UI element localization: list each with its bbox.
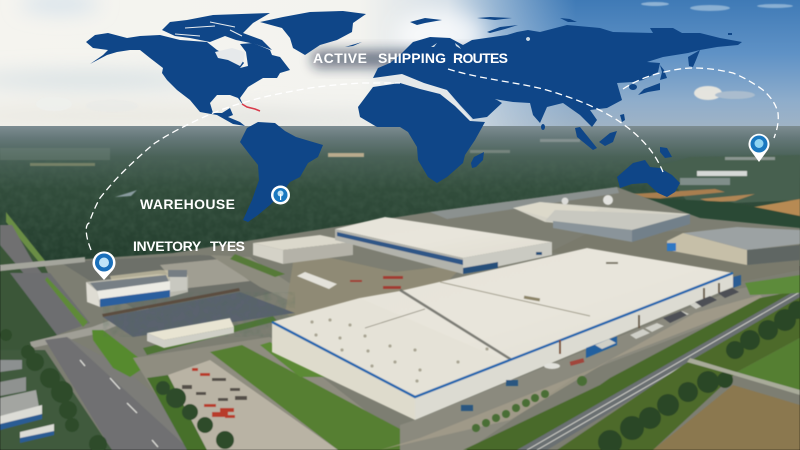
shipping routes dashed lines bbox=[86, 68, 778, 250]
map: Greenland bbox=[260, 11, 366, 55]
map: Eurasia bbox=[373, 25, 742, 127]
map: Canadian Arctic islands bbox=[162, 13, 272, 50]
title: active shipping routes: ROUTES bbox=[453, 50, 508, 66]
warehouse: main large distribution centre bbox=[272, 248, 741, 432]
warehouse: middle building bbox=[253, 217, 552, 274]
red route mark bbox=[242, 104, 260, 111]
route: Asia-Australia arc bbox=[448, 69, 663, 172]
map: Kamchatka bbox=[688, 50, 700, 67]
map: Sumatra bbox=[575, 127, 597, 150]
map: New Guinea bbox=[660, 147, 672, 158]
label: inventory types: INVETORY bbox=[133, 238, 202, 254]
map: Arctic islands bbox=[410, 17, 732, 35]
pin: right destination bbox=[749, 134, 770, 162]
industrial ground and roads bbox=[0, 187, 800, 450]
map: Sakhalin bbox=[660, 65, 667, 80]
title: active shipping routes: ACTIVE bbox=[313, 50, 367, 66]
title: active shipping routes: SHIPPING bbox=[378, 50, 446, 66]
route: Americas arc bbox=[86, 83, 400, 250]
map: Korea bbox=[629, 84, 637, 90]
route: Pacific arc bbox=[623, 68, 778, 138]
forest and distant land bbox=[0, 126, 800, 266]
warehouse: far right complex bbox=[513, 195, 800, 265]
pin: South America marker bbox=[271, 186, 290, 204]
sky background bbox=[0, 0, 800, 135]
map: Sri Lanka bbox=[541, 124, 545, 130]
pin: left warehouse bbox=[92, 251, 115, 280]
map: North and Central America bbox=[86, 33, 290, 126]
map: Iceland bbox=[345, 42, 362, 47]
map: South America bbox=[240, 122, 323, 222]
warehouse: white shed bbox=[147, 318, 234, 348]
warehouse: left building with car park bbox=[86, 270, 188, 307]
map: Philippines bbox=[620, 114, 625, 122]
map: Caspian and Aral lakes bbox=[431, 37, 530, 49]
map: Arctic channels bbox=[175, 22, 242, 36]
world map bbox=[86, 11, 742, 222]
label: inventory types: TYES bbox=[210, 238, 245, 254]
map: Borneo bbox=[599, 131, 617, 146]
map: Mediterranean strip bbox=[373, 72, 472, 122]
map: Africa bbox=[358, 83, 485, 183]
label: warehouse: WAREHOUSE bbox=[140, 196, 235, 212]
label shadow: routes bbox=[312, 50, 517, 68]
map: Madagascar bbox=[471, 152, 484, 168]
map: Japan bbox=[638, 83, 660, 95]
map: Hudson Bay bbox=[215, 48, 245, 66]
map: Australia bbox=[617, 160, 680, 197]
